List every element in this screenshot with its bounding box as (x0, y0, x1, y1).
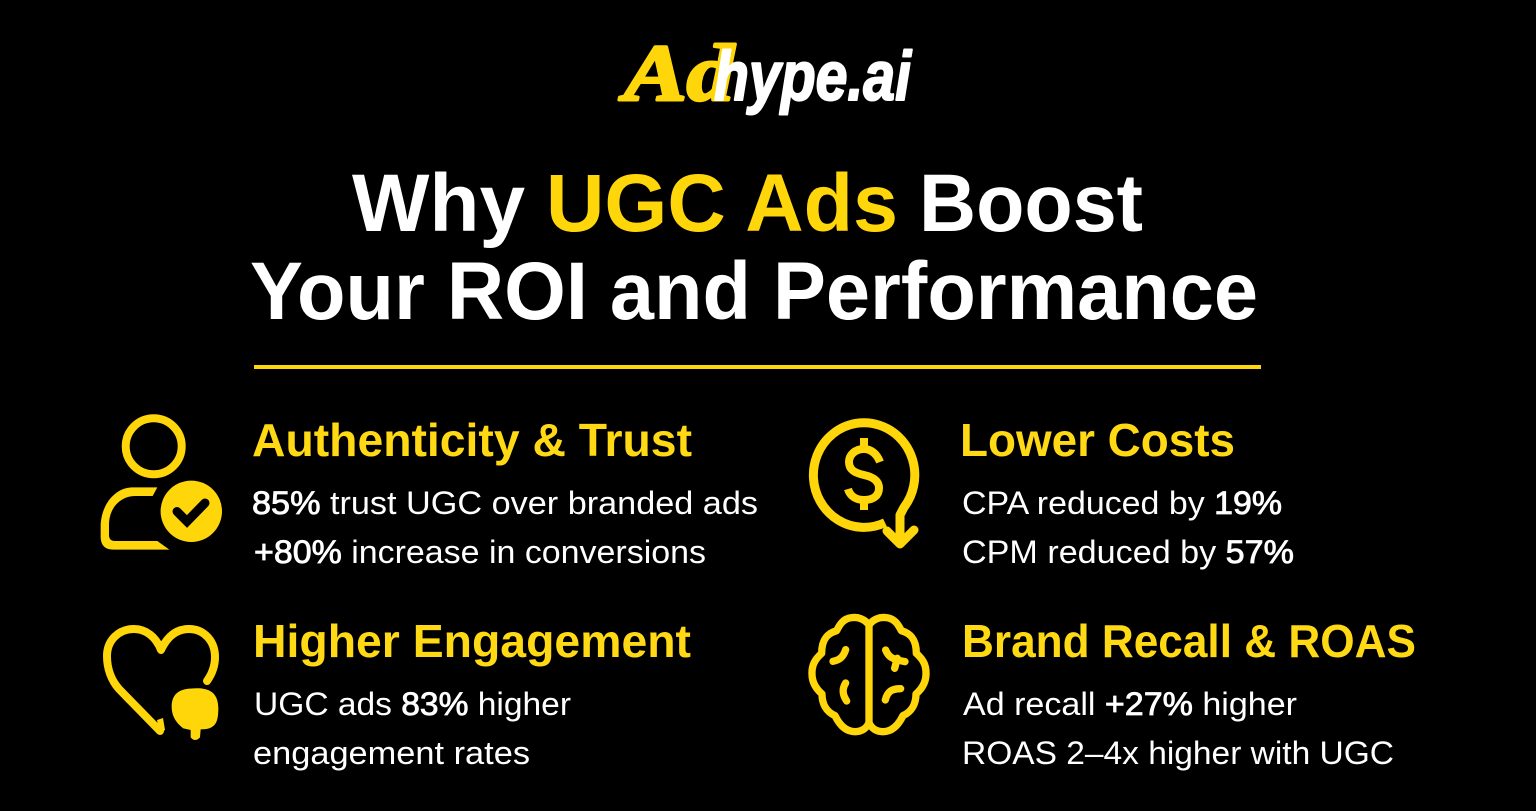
panel: brand recall and ROAS (812, 615, 1416, 771)
text: trust statistics: 85% trust UGC over branded ads (252, 485, 758, 521)
logo (618, 30, 912, 118)
panel: higher engagement (107, 615, 691, 771)
heading: brand recall and ROAS: Brand Recall & ROAS (962, 615, 1416, 667)
heading: lower costs: Lower Costs (960, 414, 1235, 466)
text: cost statistics: CPA reduced by 19% (962, 485, 1282, 521)
text: trust statistics: +80% increase in conversions (254, 534, 706, 570)
heading: higher engagement: Higher Engagement (253, 615, 691, 667)
logo: Ad (618, 30, 735, 118)
text: engagement statistics (253, 686, 571, 771)
title: UGC Ads (546, 158, 898, 249)
logo: hype.ai (714, 37, 912, 115)
text: recall statistics: ROAS 2–4x higher with UGC (962, 735, 1394, 771)
icon: brain (812, 617, 926, 732)
icon: person with check badge (101, 418, 222, 550)
text: engagement statistics: UGC ads 83% higher (254, 686, 571, 722)
heading: authenticity and trust: Authenticity & Trust (252, 414, 692, 466)
text: recall statistics (962, 686, 1394, 771)
text: cost statistics: CPM reduced by 57% (962, 534, 1294, 570)
text: engagement statistics: engagement rates (253, 735, 530, 771)
title: Boost (919, 158, 1143, 249)
text: recall statistics: Ad recall +27% higher (963, 686, 1297, 722)
icon: dollar with down arrow (813, 423, 915, 544)
title: Why (352, 158, 525, 249)
title: Your ROI and Performance (250, 246, 1258, 337)
title (250, 158, 1258, 337)
text: cost statistics (962, 485, 1294, 570)
panel: authenticity and trust (101, 414, 758, 570)
panel: lower costs (813, 414, 1294, 570)
text: trust statistics (252, 485, 758, 570)
icon: heart with blob (107, 629, 218, 740)
